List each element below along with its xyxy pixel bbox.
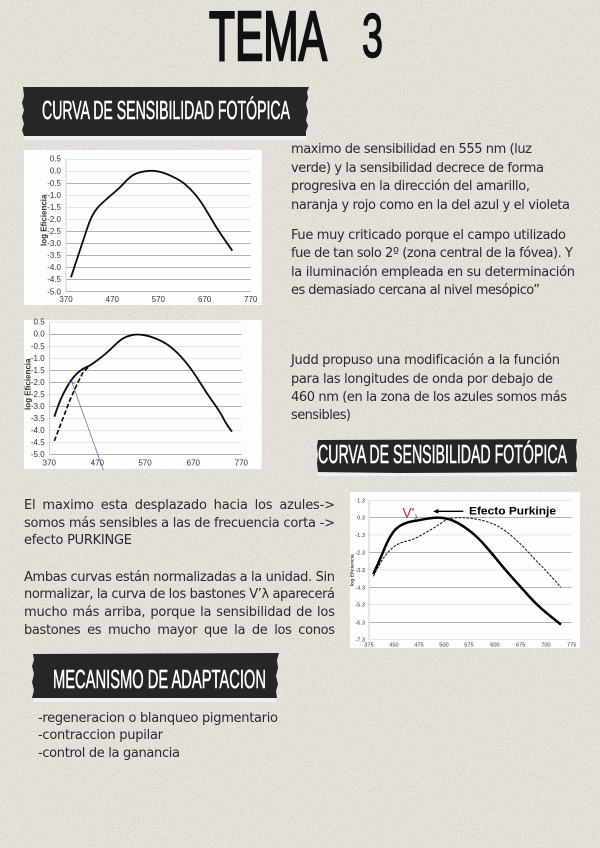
chart: log eficiencia 2 with dashed correction: 570 <box>138 458 152 467</box>
chart: log eficiencia 2 with dashed correction: -2.0 <box>31 378 45 387</box>
chart: log eficiencia 1: -5.0 <box>47 287 62 296</box>
chart: log eficiencia 1: 470 <box>106 295 120 304</box>
banner: mecanismo de adaptacion: MECANISMO DE ADAPTACION <box>53 664 266 694</box>
text block: efecto Purkinge: efecto PURKINGE <box>24 533 132 548</box>
text block: campo utilizado: fue de tan solo 2º (zona central de la fóvea). Y <box>291 246 573 261</box>
chart: efecto Purkinje <box>349 492 580 649</box>
text block: campo utilizado: la iluminación empleada en su determinación <box>291 265 575 280</box>
chart: efecto Purkinje: log Eficiencia <box>349 554 355 586</box>
text block: campo utilizado: Fue muy criticado porque el campo utilizado <box>291 228 566 243</box>
chart: efecto Purkinje: 1.3 <box>357 498 365 504</box>
text block: campo utilizado: es demasiado cercana al nivel mesópico” <box>291 283 540 298</box>
chart: log eficiencia 1: 770 <box>244 295 258 304</box>
chart: efecto Purkinje: 475 <box>414 643 424 649</box>
text block: efecto Purkinge: El maximo esta desplazado hacia los azules-> <box>24 498 335 513</box>
title: 3 <box>362 2 383 71</box>
text block: curvas normalizadas: mucho más arriba, porque la sensibilidad de los <box>24 605 335 620</box>
chart: log eficiencia 2 with dashed correction: -1.5 <box>31 366 45 375</box>
text block: Judd: sensibles) <box>291 408 351 423</box>
chart: efecto Purkinje: 575 <box>464 643 474 649</box>
chart: efecto Purkinje: 0.3 <box>357 516 365 522</box>
text block: maximo de sensibilidad <box>291 142 570 213</box>
text block: efecto Purkinge: somos más sensibles a las de frecuencia corta -> <box>24 516 335 531</box>
chart: efecto Purkinje: 500 <box>439 643 449 649</box>
chart: log eficiencia 1: -3.5 <box>47 251 62 260</box>
chart: log eficiencia 1: 370 <box>59 295 73 304</box>
list: mecanismos: -control de la ganancia <box>38 746 180 761</box>
text block: maximo de sensibilidad: naranja y rojo como en la del azul y el violeta <box>291 198 570 213</box>
text block: Judd: 460 nm (en la zona de los azules somos más <box>291 390 567 405</box>
chart: log eficiencia 2 with dashed correction: 470 <box>91 458 105 467</box>
chart: log eficiencia 1: -2.0 <box>47 215 62 224</box>
list: mecanismos: -regeneracion o blanqueo pigmentario <box>38 711 278 726</box>
chart: log eficiencia 2 with dashed correction: -4.5 <box>31 438 45 447</box>
banner: curva de sensibilidad fotópica 1 <box>22 87 309 140</box>
chart: efecto Purkinje: -1.3 <box>355 533 365 539</box>
list: mecanismos: -contraccion pupilar <box>38 728 164 743</box>
chart: log eficiencia 2 with dashed correction: -3.5 <box>31 414 45 423</box>
chart: log eficiencia 2 with dashed correction <box>23 318 262 470</box>
chart: log eficiencia 1: -3.0 <box>47 239 62 248</box>
text block: Judd: para las longitudes de onda por debajo de <box>291 372 553 387</box>
text block: efecto Purkinge <box>24 498 335 548</box>
text block: maximo de sensibilidad: verde) y la sensibilidad decrece de forma <box>291 161 544 176</box>
chart: log eficiencia 1: -1.5 <box>47 203 62 212</box>
chart: log eficiencia 2 with dashed correction: 0.5 <box>34 318 45 327</box>
chart: efecto Purkinje: 450 <box>389 643 399 649</box>
chart: log eficiencia 1: 0.5 <box>50 155 62 164</box>
chart: log eficiencia 2 with dashed correction: 370 <box>43 458 57 467</box>
text block: Judd <box>290 353 567 423</box>
chart: log eficiencia 1: -4.0 <box>47 263 62 272</box>
chart: log eficiencia 1 <box>24 150 262 305</box>
chart: log eficiencia 2 with dashed correction: -2.5 <box>31 390 45 399</box>
chart: efecto Purkinje: -3.3 <box>355 568 365 574</box>
text block: curvas normalizadas <box>24 570 335 638</box>
chart: log eficiencia 2 with dashed correction: 0.0 <box>34 330 45 339</box>
chart: log eficiencia 2 with dashed correction: -1.0 <box>31 354 45 363</box>
chart: log eficiencia 1: 570 <box>152 295 166 304</box>
chart: log eficiencia 1: 0.0 <box>50 167 62 176</box>
chart: efecto Purkinje: -5.3 <box>355 603 365 609</box>
banner: curva de sensibilidad fotópica 1: CURVA DE SENSIBILIDAD FOTÓPICA <box>42 95 290 125</box>
chart: efecto Purkinje: 600 <box>490 643 500 649</box>
chart: log eficiencia 1: -0.5 <box>47 179 62 188</box>
chart: log eficiencia 2 with dashed correction: 770 <box>235 458 249 467</box>
chart: efecto Purkinje: 700 <box>541 643 551 649</box>
chart: efecto Purkinje: Efecto Purkinje <box>469 506 556 518</box>
chart: log eficiencia 2 with dashed correction: -5.0 <box>31 450 45 459</box>
chart: efecto Purkinje: 775 <box>567 643 576 649</box>
chart: efecto Purkinje: -7.3 <box>355 638 365 644</box>
text block: campo utilizado <box>291 228 575 298</box>
chart: log eficiencia 1: 670 <box>198 295 212 304</box>
chart: efecto Purkinje: 375 <box>364 643 374 649</box>
chart: log eficiencia 2 with dashed correction: log Eficiencia <box>23 358 32 410</box>
chart: efecto Purkinje: λ <box>414 513 418 522</box>
text block: Judd: Judd propuso una modificación a la función <box>290 353 560 368</box>
banner: mecanismo de adaptacion <box>32 653 279 702</box>
chart: log eficiencia 1: log Eficiencia <box>40 194 49 246</box>
list: mecanismos <box>38 711 278 761</box>
chart: log eficiencia 1: -2.5 <box>47 227 62 236</box>
text block: maximo de sensibilidad: maximo de sensibilidad en 555 nm (luz <box>291 142 532 157</box>
chart: log eficiencia 1: -4.5 <box>47 275 62 284</box>
chart: efecto Purkinje: -6.3 <box>355 620 365 626</box>
chart: log eficiencia 1: -1.0 <box>47 191 62 200</box>
text block: maximo de sensibilidad: progresiva en la dirección del amarillo, <box>291 179 530 194</box>
chart: efecto Purkinje: 675 <box>516 643 525 649</box>
chart: efecto Purkinje: -4.3 <box>355 585 365 591</box>
chart: log eficiencia 2 with dashed correction: 670 <box>187 458 201 467</box>
chart: efecto Purkinje: V' <box>402 504 414 520</box>
chart: efecto Purkinje: -2.3 <box>355 550 365 556</box>
chart: log eficiencia 2 with dashed correction: -0.5 <box>31 342 45 351</box>
chart: log eficiencia 2 with dashed correction: -4.0 <box>31 426 45 435</box>
chart: log eficiencia 2 with dashed correction: -3.0 <box>31 402 45 411</box>
text block: curvas normalizadas: Ambas curvas están normalizadas a la unidad. Sin <box>24 570 335 585</box>
text block: curvas normalizadas: bastones es mucho mayor que la de los conos <box>24 623 335 638</box>
text block: curvas normalizadas: normalizar, la curva de los bastones V’λ aparecerá <box>24 587 335 602</box>
